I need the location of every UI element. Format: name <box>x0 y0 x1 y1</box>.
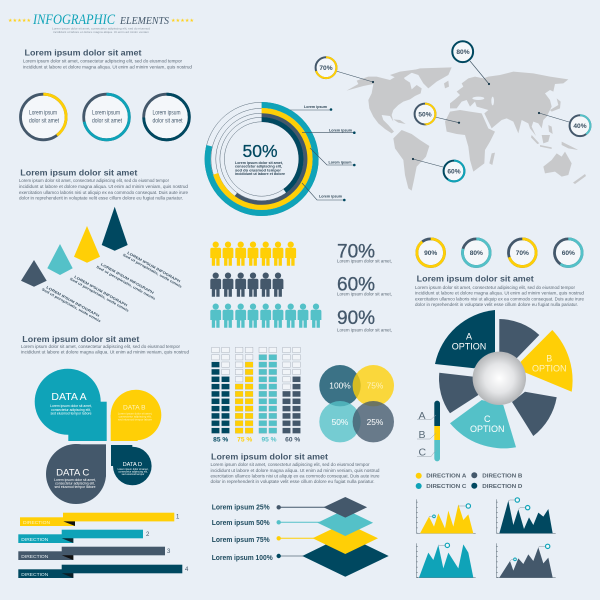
text block: butterfly heading: Lorem ipsum dolor sit amet <box>22 334 139 344</box>
petal: data C: DATA C <box>56 467 89 478</box>
circle: yellow: dolor sit amet <box>29 118 59 124</box>
pie segment C <box>450 400 516 448</box>
pie labels: OPTION <box>452 342 486 352</box>
people row: slate 60% <box>210 272 283 297</box>
ring chart 50%: 50% <box>242 141 278 161</box>
petal: data D: consectetur adipiscing elit, <box>118 470 148 473</box>
legend: directions: DIRECTION B <box>482 473 522 479</box>
text block: pyramids heading: incididunt ut labore et dolore magna aliqua. Ut enim ad minim veniam, quis nostrud <box>19 184 188 190</box>
ribbon 4 <box>18 565 189 578</box>
ribbon 1 <box>20 513 180 526</box>
circle: navy <box>144 94 189 140</box>
ribbon 3 <box>18 547 171 560</box>
layer labels <box>212 504 273 562</box>
layer 100% <box>302 535 389 577</box>
map marker 80%: 80% <box>456 49 470 56</box>
venn diagram <box>319 365 394 442</box>
people percentages: 90% <box>337 308 375 329</box>
map marker 60%: 60% <box>447 168 461 175</box>
pie center sphere <box>473 352 526 405</box>
diagonal captions: LOREM IPSUM INFOGRAPH <box>46 285 100 318</box>
americas <box>347 67 452 191</box>
petal: data C: Lorem ipsum dolor sit amet, <box>54 478 96 482</box>
text block: pie heading: Lorem ipsum dolor sit amet, consectetur adipiscing elit, sed do eiusmod tempor <box>415 285 575 291</box>
bar chart: 85 % <box>213 436 228 443</box>
pie labels: A <box>466 332 472 342</box>
text block: pyramids heading: exercitation ullamco laboris nisi ut aliquip ex ea commodo consequat. Duis aute irure <box>19 190 188 196</box>
title: Lorem ipsum dolor sit amet, consectetur adipiscing elit, sed do eiusmod <box>52 26 150 30</box>
pie segment B <box>521 330 573 392</box>
text block: pyramids heading: Lorem ipsum dolor sit amet <box>20 168 137 178</box>
text block: butterfly heading <box>21 334 189 356</box>
layer labels: Lorem ipsum 25% <box>212 504 270 511</box>
pyramid chart <box>21 207 183 323</box>
pie labels: C <box>484 414 491 424</box>
pie segment slate left <box>439 373 478 413</box>
area chart: slate <box>497 543 556 578</box>
area chart: yellow <box>417 499 476 533</box>
world map <box>347 67 586 191</box>
pie chart options <box>435 310 573 448</box>
pie labels: B <box>546 354 552 364</box>
venn diagram: 25% <box>367 417 384 427</box>
bar chart <box>212 347 300 443</box>
text block: pie heading: exercitation ullamco laboris nisi ut aliquip ex ea commodo consequat. Duis aute irure <box>415 296 584 302</box>
gauge 70% <box>508 239 536 266</box>
ribbon 2: DIRECTION <box>21 537 48 542</box>
ring chart callouts: Lorem ipsum <box>328 160 352 164</box>
text block: pyramids heading: dolor in reprehenderit in voluptate velit esse cillum dolore eu fugiat nulla pariatur. <box>19 196 183 202</box>
text block: layers heading: incididunt ut labore et dolore magna aliqua. Ut enim ad minim veniam, quis nostrud <box>210 468 380 474</box>
text block: layers heading: Lorem ipsum dolor sit amet, consectetur adipiscing elit, sed do eiusmod tempor <box>210 462 370 468</box>
direction ribbons <box>18 513 189 578</box>
people percentages <box>337 242 392 334</box>
people percentages: Lorem ipsum dolor sit amet, <box>337 292 392 298</box>
people row: yellow 70% <box>210 242 296 266</box>
ring chart callouts: Lorem ipsum <box>329 128 353 132</box>
gauge 70%: 70% <box>516 250 529 257</box>
title: ELEMENTS <box>119 16 170 27</box>
ring chart callouts: Lorem ipsum <box>304 105 328 109</box>
layer 75% <box>313 523 378 554</box>
ABC side scale <box>417 401 440 461</box>
text block: pyramids heading: Lorem ipsum dolor sit amet, consectetur adipiscing elit, sed do eiusmod tempor <box>19 178 169 184</box>
text block: pie heading <box>415 274 584 308</box>
bar chart: 60 % <box>285 436 300 443</box>
diagonal captions: Sed ut perspiciatis, unde omnis <box>69 277 130 313</box>
gauge 60%: 60% <box>562 250 575 257</box>
petal: data C: sed eiusmod tempor labore <box>54 485 96 489</box>
venn diagram: 75% <box>367 381 384 391</box>
title: incididunt ut labore et dolore magna aliqua. Ut enim ad minim veniam <box>53 30 150 34</box>
venn diagram: 100% <box>329 381 351 391</box>
bar chart: 95 % <box>261 436 277 443</box>
petal: data B: Lorem ipsum dolor sit amet, <box>118 412 152 416</box>
ABC side scale: B <box>418 429 426 441</box>
pyramid: yellow <box>74 226 100 263</box>
map marker 80% <box>452 41 473 62</box>
diagonal captions: Sed ut perspiciatis, unde omnis <box>122 253 183 289</box>
petal: data A <box>35 369 107 441</box>
ring chart 50% <box>205 102 318 216</box>
text block: layers heading: dolor in reprehenderit in voluptate velit esse cillum dolore eu fugiat nulla pariatur. <box>210 479 374 485</box>
ribbon 2: 2 <box>146 532 150 538</box>
petal: data B: consectetur adipiscing elit, <box>119 414 152 418</box>
text block: intro: Lorem ipsum dolor sit amet, consectetur adipiscing elit, sed do eiusmod tempor <box>23 58 182 64</box>
diagonal captions <box>41 251 183 323</box>
diagonal captions: Sed ut perspiciatis, unde omnis <box>41 287 102 323</box>
text block: layers heading <box>210 452 380 485</box>
petal: data A: sed eiusmod tempor labore <box>50 412 92 416</box>
petal: data C <box>46 444 106 504</box>
pie segment A <box>435 310 495 368</box>
legend: directions: DIRECTION A <box>426 473 466 479</box>
layer labels: Lorem ipsum 50% <box>212 520 270 527</box>
people chart <box>210 242 321 328</box>
pie labels: OPTION <box>532 364 567 374</box>
layer 25% <box>324 497 367 518</box>
pie labels <box>452 332 567 434</box>
gauge 60% <box>554 239 582 266</box>
petal: data D: DATA D <box>123 462 142 468</box>
text block: layers heading: exercitation ullamco laboris nisi ut aliquip ex ea commodo consequat. Duis aute irure <box>210 474 380 480</box>
gauge 80%: 80% <box>470 250 483 257</box>
petal: data D <box>111 445 152 485</box>
three progress circles <box>20 94 189 140</box>
text block: layers heading: Lorem ipsum dolor sit amet <box>211 452 328 462</box>
title <box>8 12 195 34</box>
ribbon 1: 1 <box>176 514 180 520</box>
diagonal captions: Sed ut perspiciatis, unde omnis <box>96 265 156 301</box>
ring chart callouts <box>290 105 356 201</box>
circle: navy: Lorem ipsum <box>152 110 180 116</box>
title: INFOGRAPHIC <box>32 12 115 28</box>
ribbon 3: 3 <box>167 549 171 555</box>
ring chart callouts: Lorem ipsum <box>319 194 343 198</box>
people row: teal 90% <box>210 304 321 328</box>
petal: data C: consectetur adipiscing elit, <box>55 482 95 486</box>
map marker 50%: 50% <box>418 111 432 118</box>
gauge 80% <box>462 239 490 266</box>
petal: data A: DATA A <box>51 391 87 403</box>
bar chart: 75 % <box>237 436 252 443</box>
legend: directions: DIRECTION C <box>426 484 466 490</box>
text block: butterfly heading: incididunt ut labore et dolore magna aliqua. Ut enim ad minim veniam, quis nostrud <box>21 350 189 356</box>
petal: data B: DATA B <box>123 404 146 411</box>
text block: pie heading: incididunt ut labore et dolore magna aliqua. Ut enim ad minim veniam, quis nostrud <box>415 291 584 297</box>
butterfly diagram <box>35 369 161 504</box>
layer labels: Lorem ipsum 100% <box>212 555 273 562</box>
gauge 90% <box>417 239 445 266</box>
gauge 90%: 90% <box>424 250 437 257</box>
map marker 40% <box>570 115 590 136</box>
small gauges row <box>417 239 582 266</box>
circle: teal: dolor sit amet <box>92 118 122 124</box>
ABC side scale: C <box>418 446 426 458</box>
old world <box>435 69 586 184</box>
petal: data A: consectetur adipiscing elit, <box>51 408 91 412</box>
diagonal captions: LOREM IPSUM INFOGRAPH <box>127 251 181 284</box>
legend: directions: DIRECTION D <box>482 484 522 490</box>
petal: data B: sed eiusmod tempor labore <box>118 418 152 422</box>
circle: teal: Lorem ipsum <box>92 110 120 116</box>
petal: data D: sed eiusmod tempor <box>122 473 144 476</box>
pie segment slate right <box>512 392 557 436</box>
circle: teal <box>84 94 129 140</box>
text block: butterfly heading: Lorem ipsum dolor sit amet, consectetur adipiscing elit, sed do eiusmod tempor <box>21 344 180 350</box>
people percentages: Lorem ipsum dolor sit amet, <box>337 328 392 334</box>
text block: intro <box>23 48 192 70</box>
map marker 70% <box>316 57 336 78</box>
ring chart 50%: Lorem ipsum dolor sit amet, <box>235 161 283 165</box>
pie segment slate top <box>499 319 539 358</box>
map marker 50% <box>415 104 435 124</box>
diagonal captions: LOREM IPSUM INFOGRAPH <box>100 262 155 295</box>
ribbon 3: DIRECTION <box>21 554 48 559</box>
map marker 40%: 40% <box>573 123 587 130</box>
area chart: navy <box>497 498 556 533</box>
title: ★★★★★ <box>171 18 195 24</box>
ring chart 50%: incididunt ut labore et dolore <box>235 172 285 176</box>
petal: data A: Lorem ipsum dolor sit amet, <box>50 404 92 408</box>
people percentages: 70% <box>337 242 375 263</box>
ribbon 4: DIRECTION <box>21 572 48 577</box>
venn diagram: 50% <box>332 417 349 427</box>
area chart: teal <box>417 543 476 578</box>
text block: intro: incididunt ut labore et dolore magna aliqua. Ut enim ad minim veniam, quis nostrud <box>23 64 192 70</box>
layer labels: Lorem ipsum 75% <box>212 537 270 544</box>
petal: data D: Lorem ipsum dolor sit amet, <box>118 468 149 471</box>
pyramid: light teal <box>47 244 73 275</box>
ribbon 4: 4 <box>185 567 189 573</box>
ABC side scale: A <box>418 410 426 422</box>
text block: intro: Lorem ipsum dolor sit amet <box>24 48 142 58</box>
ring chart 50%: sed do eiusmod tempor <box>235 168 282 172</box>
text block: pie heading: dolor in reprehenderit in voluptate velit esse cillum dolore eu fugiat nulla pariatur. <box>415 302 578 308</box>
circle: yellow <box>20 94 66 140</box>
map marker lines <box>336 61 569 167</box>
people percentages: 60% <box>337 275 375 296</box>
title: ★★★★★ <box>8 18 32 24</box>
layer 50% <box>318 509 373 536</box>
people percentages: Lorem ipsum dolor sit amet, <box>337 258 392 264</box>
diagonal captions: LOREM IPSUM INFOGRAPH <box>74 275 128 308</box>
circle: yellow: Lorem ipsum <box>29 110 57 116</box>
ribbon 1: DIRECTION <box>23 520 50 525</box>
map marker 70%: 70% <box>319 65 333 72</box>
pie labels: OPTION <box>470 424 505 434</box>
legend: directions <box>416 472 522 490</box>
text block: pie heading: Lorem ipsum dolor sit amet <box>417 274 534 284</box>
circle: navy: dolor sit amet <box>152 118 183 124</box>
text block: pyramids heading <box>19 168 188 202</box>
map marker 60% <box>444 161 464 181</box>
petal: data B <box>111 390 161 441</box>
ring chart 50%: consectetur adipiscing elit, <box>235 165 282 169</box>
area charts <box>417 498 556 578</box>
pyramid: slate <box>21 260 47 287</box>
layer dots <box>276 505 281 558</box>
ribbon 2 <box>18 530 150 543</box>
pyramid: navy <box>102 207 128 251</box>
stacked layers chart <box>212 497 389 577</box>
